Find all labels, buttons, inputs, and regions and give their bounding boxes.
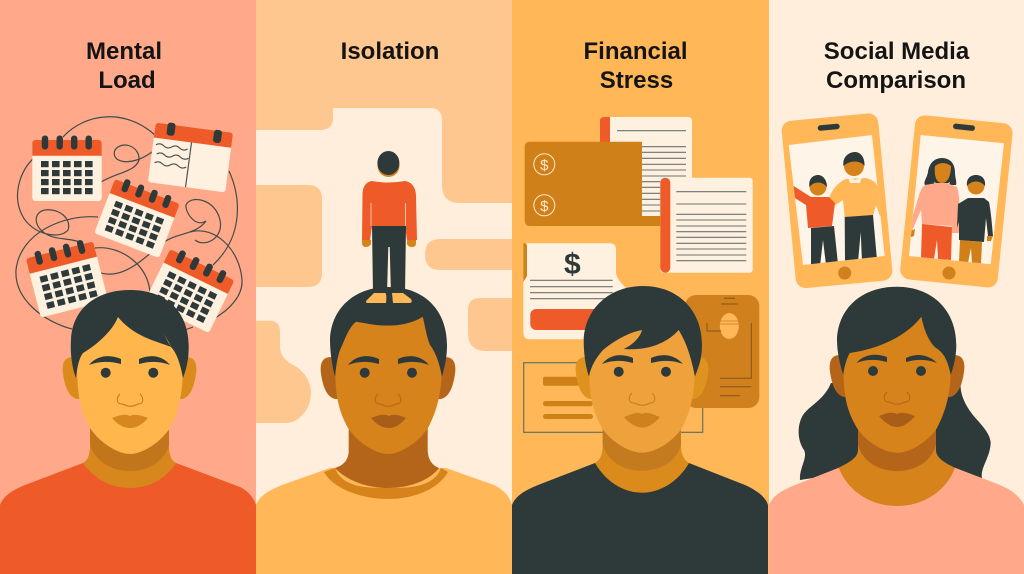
panel: mental load [0,0,256,574]
title: Social Media Comparison: Social Media [824,38,970,65]
folder with coins: $ [540,198,549,215]
document: front page [660,178,753,273]
phone: left [781,113,893,289]
panel: isolation [256,0,512,574]
phone: right [899,114,1013,288]
receipt with dollar sign [523,243,628,339]
title: Isolation: Isolation [341,38,439,65]
background blobs [256,0,512,423]
calendar: lower right [145,245,236,333]
receipt with dollar sign: $ [564,248,581,281]
calendar: lower left [25,237,108,318]
title: Financial Stress: Stress [600,67,673,94]
brown tag card [685,295,759,408]
calendar: notes page [148,121,233,192]
person: isolation [256,287,512,574]
calendar: centre [94,175,181,258]
panel: social media comparison [769,0,1024,574]
person: financial stress [512,286,768,574]
small figure standing on head [362,151,417,303]
id card outline [524,363,703,432]
family photo: right phone [909,158,993,264]
calendar: top left [32,136,102,201]
document: back page [600,117,692,217]
title: Social Media Comparison: Comparison [826,67,966,94]
tangled scribble lines [16,117,242,330]
folder with coins: $ [540,157,549,174]
title: Mental Load: Load [98,67,156,94]
title: Mental Load: Mental [86,38,162,65]
title: Financial Stress: Financial [583,38,688,65]
folder with coins [525,142,664,226]
panel: financial stress [512,0,769,574]
family photo: left phone [790,152,884,266]
person: social media comparison [769,287,1024,574]
person: mental load [0,290,256,574]
